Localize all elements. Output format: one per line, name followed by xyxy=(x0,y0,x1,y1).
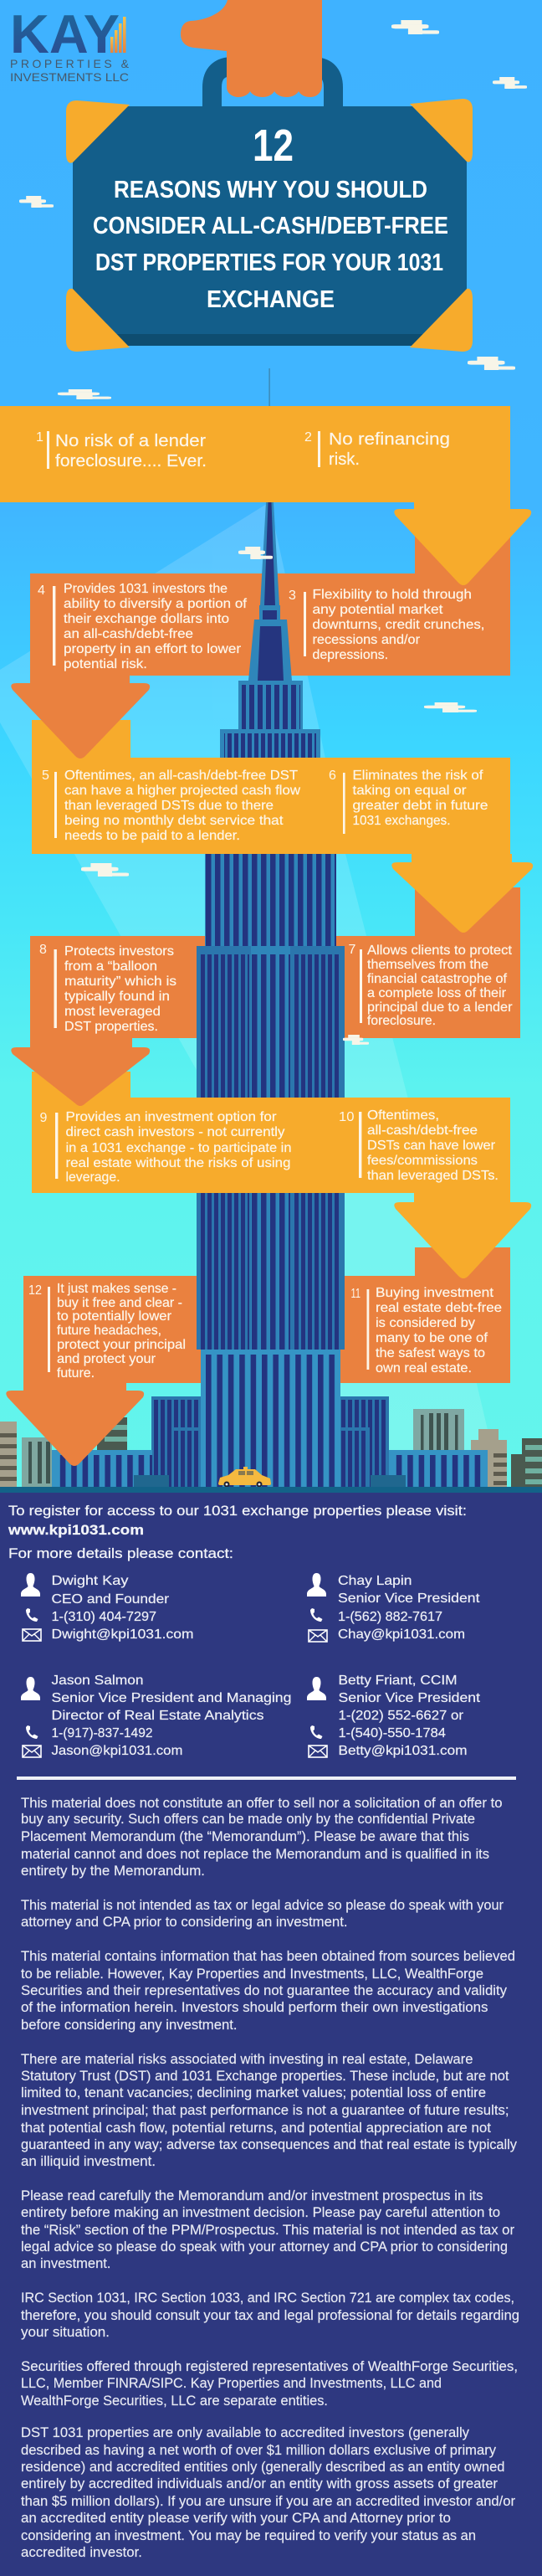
arrow: 4 to 5 xyxy=(11,676,150,758)
reason 11: the safest ways to xyxy=(376,1346,485,1360)
orange band 3-4 xyxy=(30,536,510,695)
disclaimer text: considering an investment. You may be required to verify your status as an xyxy=(21,2528,476,2543)
reason 11: own real estate. xyxy=(376,1361,472,1375)
disclaimer text: attorney and CPA prior to considering an investment. xyxy=(21,1915,348,1930)
disclaimer text: WealthForge Securities, LLC are separate entities. xyxy=(21,2393,328,2409)
reason 5: being no monthly debt service that xyxy=(64,814,284,828)
orange band 11-12 xyxy=(23,1247,510,1398)
contact: Jason Salmon: Jason@kpi1031.com xyxy=(52,1744,182,1758)
reason 1: foreclosure.... Ever. xyxy=(55,452,207,470)
taxi xyxy=(218,1467,271,1487)
reason 12: It just makes sense - xyxy=(57,1282,176,1296)
disclaimer text: an accredited entity please verify with your CPA and Attorney prior to xyxy=(21,2511,451,2526)
spire xyxy=(260,502,279,605)
reason 10: all-cash/debt-free xyxy=(367,1123,478,1138)
reason 7 xyxy=(348,943,513,1028)
reason 10: Oftentimes, xyxy=(367,1108,439,1123)
clouds xyxy=(19,20,527,877)
reason 3 xyxy=(289,588,485,662)
disclaimer text: an investment. xyxy=(21,2256,110,2271)
reason 5 xyxy=(42,769,300,843)
logo: Kay Properties: PROPERTIES & xyxy=(10,57,130,70)
contact: Dwight Kay: 1-(310) 404-7297 xyxy=(52,1610,156,1624)
call to action: To register for access to our 1031 exchange properties please visit: xyxy=(8,1504,467,1519)
reason 10 xyxy=(339,1108,499,1183)
title: REASONS WHY YOU SHOULD xyxy=(114,177,427,203)
contact: Chay Lapin: Senior Vice President xyxy=(338,1591,480,1606)
reason 3: Flexibility to hold through xyxy=(313,588,472,602)
briefcase with hand xyxy=(66,0,473,352)
reason 9: direct cash investors - not currently xyxy=(65,1125,284,1139)
disclaimer text: This material does not constitute an offer to sell nor a solicitation of an offer to xyxy=(21,1796,503,1811)
reason 2: 2 xyxy=(304,430,312,445)
logo: Kay Properties: INVESTMENTS LLC xyxy=(10,70,129,84)
contact: Betty Friant xyxy=(307,1674,481,1758)
contact: Chay Lapin: 1-(562) 882-7617 xyxy=(338,1610,442,1624)
disclaimer text: an illiquid investment. xyxy=(21,2154,156,2169)
disclaimer text: entirety before making an investment decision. Please pay careful attention to xyxy=(21,2205,500,2220)
title xyxy=(93,121,448,313)
reason 8: maturity” which is xyxy=(64,974,176,989)
disclaimer text: described as having a net worth of over $1 million dollars exclusive of primary xyxy=(21,2443,497,2458)
upper tiers xyxy=(238,681,303,729)
reason 7: 7 xyxy=(348,943,356,957)
disclaimer text: than $5 million dollars). If you are unsure if you are an accredited investor and/or xyxy=(21,2494,516,2509)
side buildings xyxy=(0,1409,542,1487)
reason 11: many to be one of xyxy=(376,1331,488,1345)
reason 9: Provides an investment option for xyxy=(65,1110,277,1124)
arrow: 2 to 3 xyxy=(394,502,531,585)
reason 9: real estate without the risks of using xyxy=(65,1156,291,1170)
title: CONSIDER ALL-CASH/DEBT-FREE xyxy=(93,213,448,239)
footer panel xyxy=(0,1487,542,2576)
hand xyxy=(181,0,322,97)
reason 9: 9 xyxy=(40,1111,47,1125)
reason 4: 4 xyxy=(38,584,45,598)
contact: Chay Lapin: Chay Lapin xyxy=(338,1574,412,1588)
reason 3: any potential market xyxy=(313,603,443,617)
reason 8: Protects investors xyxy=(64,944,174,959)
gold band 5-6 xyxy=(32,720,512,871)
reason 8: most leveraged xyxy=(64,1005,161,1019)
reason 4: an all-cash/debt-free xyxy=(64,627,193,641)
reason 5: needs to be paid to a lender. xyxy=(64,829,240,843)
reason 12: buy it free and clear - xyxy=(57,1296,182,1310)
title: EXCHANGE xyxy=(207,286,335,313)
disclaimer text: therefore, you should consult your tax and legal professional for details regarding xyxy=(21,2308,519,2323)
reason 5: Oftentimes, an all-cash/debt-free DST xyxy=(64,769,298,783)
reason 8: DST properties. xyxy=(64,1020,158,1034)
reason 8 xyxy=(39,943,176,1034)
reason 4: their exchange dollars into xyxy=(64,612,229,626)
reason 8: from a “balloon xyxy=(64,959,157,974)
reason 1: 1 xyxy=(36,430,43,445)
reason 3: recessions and/or xyxy=(313,633,421,647)
disclaimer text: residence) and accredited entities only (generally described as an entity owned xyxy=(21,2460,505,2475)
reason 6: taking on equal or xyxy=(353,784,467,798)
reason 6 xyxy=(329,769,488,834)
disclaimer text: accredited investor. xyxy=(21,2545,142,2560)
contact: Betty Friant: 1-(202) 552-6627 or xyxy=(338,1709,464,1723)
disclaimer text: Securities offered through registered representatives of WealthForge Securities, xyxy=(21,2359,518,2374)
disclaimer text: to be reliable. However, Kay Properties and Investments, LLC, WealthForge xyxy=(21,1967,483,1982)
disclaimer text: Securities and their representatives do not guarantee the accuracy and validity xyxy=(21,1983,508,1998)
arrow: 12 down xyxy=(6,1383,144,1466)
clouds over tower xyxy=(238,547,369,1045)
title: 12 xyxy=(253,121,294,171)
reason 11: real estate debt-free xyxy=(376,1301,502,1315)
reason 2 xyxy=(304,430,450,469)
logo: Kay Properties xyxy=(10,3,130,84)
arrow: 10 to 11 xyxy=(394,1193,531,1278)
disclaimer text: Placement Memorandum (the “Memorandum”). Please be aware that this xyxy=(21,1829,469,1844)
reason 6: Eliminates the risk of xyxy=(353,769,483,783)
reason 12 xyxy=(28,1282,186,1381)
reason 12: future. xyxy=(57,1366,95,1381)
disclaimer text: This material contains information that has been obtained from sources believed xyxy=(21,1949,515,1964)
reason 4: potential risk. xyxy=(64,657,147,671)
reason 11: Buying investment xyxy=(376,1286,494,1300)
disclaimer text: of the information herein. Investors should perform their own investigations xyxy=(21,2000,488,2015)
gold band 1-2 xyxy=(0,406,510,502)
reason 4 xyxy=(38,582,248,671)
light beams behind tower xyxy=(0,502,502,1490)
reason 12: future headaches, xyxy=(57,1324,161,1338)
reason 6: 1031 exchanges. xyxy=(353,814,450,828)
contact: Jason Salmon: Director of Real Estate Analytics xyxy=(52,1709,264,1723)
disclaimer text: limited to, tenant vacancies; declining market values; potential loss of entire xyxy=(21,2085,486,2100)
reason 12: and protect your xyxy=(57,1352,156,1366)
disclaimer text: IRC Section 1031, IRC Section 1033, and IRC Section 721 are complex tax codes, xyxy=(21,2291,514,2306)
reason 7: principal due to a lender xyxy=(367,1000,513,1015)
contact: Jason Salmon xyxy=(21,1674,291,1758)
reason 3: 3 xyxy=(289,589,296,603)
reason 7: foreclosure. xyxy=(367,1014,436,1028)
reason 3: downturns, credit crunches, xyxy=(313,618,485,632)
contact: Chay Lapin: Chay@kpi1031.com xyxy=(338,1627,465,1642)
logo: Kay Properties: KAY xyxy=(10,3,120,64)
contact: Dwight Kay: CEO and Founder xyxy=(52,1592,170,1607)
tower building xyxy=(52,502,488,1487)
reason 8: 8 xyxy=(39,943,47,957)
reason 10: 10 xyxy=(339,1110,355,1124)
reason 6: greater debt in future xyxy=(353,799,488,813)
reason 9: in a 1031 exchange - to participate in xyxy=(65,1141,291,1155)
disclaimer text: LLC, Member FINRA/SIPC. Kay Properties and Investments, LLC and xyxy=(21,2376,442,2391)
reason 10: fees/commissions xyxy=(367,1154,478,1168)
reason 3: depressions. xyxy=(313,648,388,662)
sky background xyxy=(0,0,542,1490)
contact: Betty Friant: Betty Friant, CCIM xyxy=(338,1674,457,1688)
call to action: For more details please contact: xyxy=(8,1546,233,1561)
main shaft xyxy=(197,946,345,1350)
arrow: 6 to 7 xyxy=(391,854,533,933)
reason 8: typically found in xyxy=(64,990,170,1004)
reason 4: ability to diversify a portion of xyxy=(64,597,248,611)
reason 2: risk. xyxy=(329,450,360,469)
reason 6: 6 xyxy=(329,769,336,783)
contact: Dwight Kay xyxy=(21,1573,194,1642)
disclaimer text xyxy=(21,1796,519,2560)
reason 12: protect your principal xyxy=(57,1338,186,1352)
contact: Chay Lapin xyxy=(307,1573,480,1642)
arrow: 8 to 9 xyxy=(11,1038,150,1106)
disclaimer text: Please read carefully the Memorandum and/or investment prospectus in its xyxy=(21,2188,483,2203)
disclaimer text: This material is not intended as tax or legal advice so please do speak with your xyxy=(21,1898,504,1913)
contact: Betty Friant: Betty@kpi1031.com xyxy=(338,1744,467,1758)
disclaimer text: investment principal; that past performance is not a guarantee of future results; xyxy=(21,2103,509,2118)
reason 1 xyxy=(36,430,207,470)
disclaimer text: legal advice so please do speak with your attorney and CPA prior to considering xyxy=(21,2239,508,2255)
antenna xyxy=(269,368,270,407)
reason 4: property in an effort to lower xyxy=(64,642,242,656)
disclaimer text: the “Risk” section of the PPM/Prospectus. This material is not intended as tax or xyxy=(21,2223,515,2238)
contact: Jason Salmon: Jason Salmon xyxy=(52,1674,144,1688)
reason 7: Allows clients to protect xyxy=(367,944,513,958)
contact: Betty Friant: 1-(540)-550-1784 xyxy=(338,1726,446,1740)
disclaimer text: There are material risks associated with investing in real estate, Delaware xyxy=(21,2052,473,2067)
wings xyxy=(151,1396,201,1487)
reason 4: Provides 1031 investors the xyxy=(64,582,228,596)
disclaimer text: before considering any investment. xyxy=(21,2018,238,2033)
disclaimer text: entirety by the Memorandum. xyxy=(21,1864,205,1879)
reason 7: themselves from the xyxy=(367,958,488,972)
disclaimer text: your situation. xyxy=(21,2325,110,2340)
title: DST PROPERTIES FOR YOUR 1031 xyxy=(95,249,443,276)
disclaimer text: DST 1031 properties are only available to accredited investors (generally xyxy=(21,2425,470,2440)
gold band 9-10 xyxy=(32,1072,510,1210)
reason 9: leverage. xyxy=(65,1170,120,1185)
arrows xyxy=(6,502,533,1466)
contact: Dwight Kay: Dwight Kay xyxy=(52,1574,129,1588)
disclaimer text: that potential cash flow, potential returns, and potential appreciation are not xyxy=(21,2121,491,2136)
reason 11: 11 xyxy=(351,1287,360,1301)
reason 7: financial catastrophe of xyxy=(367,972,508,986)
disclaimer text: material cannot and does not replace the Memorandum and is qualified in its xyxy=(21,1847,489,1862)
reason 5: 5 xyxy=(42,769,49,783)
reason 5: can have a higher projected cash flow xyxy=(64,784,300,798)
reason 1: No risk of a lender xyxy=(55,432,206,450)
contact: Dwight Kay: Dwight@kpi1031.com xyxy=(52,1627,194,1642)
reason 11: is considered by xyxy=(376,1316,475,1330)
reason 10: than leveraged DSTs. xyxy=(367,1169,499,1183)
reason 12: to potentially lower xyxy=(57,1309,172,1324)
contact: Betty Friant: Senior Vice President xyxy=(338,1691,481,1705)
reason 11 xyxy=(351,1286,502,1375)
call to action xyxy=(8,1504,467,1561)
reason 9 xyxy=(40,1110,291,1185)
reason 7: a complete loss of their xyxy=(367,986,507,1000)
disclaimer text: Statutory Trust (DST) and 1031 Exchange properties. These include, but are not xyxy=(21,2069,509,2084)
reason 2: No refinancing xyxy=(329,430,450,449)
reason 5: than leveraged DSTs due to there xyxy=(64,799,274,813)
disclaimer text: entirely by accredited individuals and/or an entity with gross assets of greater xyxy=(21,2476,499,2491)
contact: Jason Salmon: Senior Vice President and Managing xyxy=(52,1691,291,1705)
reason 10: DSTs can have lower xyxy=(367,1139,496,1153)
call to action: www.kpi1031.com xyxy=(8,1523,144,1538)
disclaimer text: guaranteed in any way; adverse tax consequences and that real estate is typically xyxy=(21,2137,518,2152)
contact: Jason Salmon: 1-(917)-837-1492 xyxy=(52,1726,153,1740)
reason 12: 12 xyxy=(28,1283,42,1298)
disclaimer text: buy any security. Such offers can be made only by the confidential Private xyxy=(21,1812,475,1827)
orange band 7-8 xyxy=(30,887,520,1055)
